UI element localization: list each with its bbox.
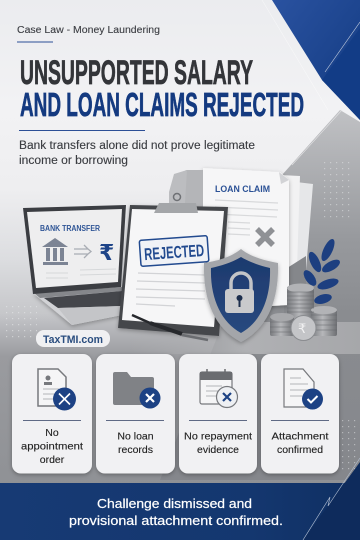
website badge bbox=[36, 330, 110, 347]
card text: No loan bbox=[117, 430, 154, 442]
subtitle bbox=[19, 140, 255, 167]
subtitle: Bank transfers alone did not prove legitimate bbox=[19, 140, 255, 152]
conclusion text bbox=[69, 497, 283, 528]
bottom band bbox=[0, 458, 360, 540]
card text: No repayment bbox=[184, 430, 252, 442]
form lines bbox=[136, 273, 205, 306]
card text bbox=[117, 430, 154, 456]
card text: records bbox=[118, 444, 153, 456]
rejected stamp bbox=[139, 236, 209, 266]
website badge: TaxTMI.com bbox=[43, 334, 103, 346]
card: no loan records bbox=[96, 354, 175, 474]
card text bbox=[272, 430, 329, 456]
card text bbox=[21, 427, 83, 466]
laptop bbox=[23, 205, 126, 325]
icon: calendar with x bbox=[200, 369, 238, 408]
laptop base bbox=[33, 286, 122, 325]
coin stacks bbox=[270, 284, 337, 340]
rejected stamp: REJECTED bbox=[144, 241, 205, 264]
icon: document with check bbox=[284, 369, 323, 410]
shield with padlock bbox=[204, 249, 278, 342]
card text bbox=[184, 430, 252, 456]
icon: folder with x bbox=[113, 372, 160, 408]
card text: confirmed bbox=[277, 444, 323, 456]
icon: bank bbox=[42, 238, 68, 265]
card: attachment confirmed bbox=[261, 354, 339, 474]
card text: Attachment bbox=[272, 430, 329, 442]
laptop screen bbox=[23, 205, 126, 294]
padlock bbox=[231, 273, 251, 292]
card text: No bbox=[45, 427, 59, 439]
clipboard clip bbox=[154, 203, 198, 213]
coin stacks: ₹ bbox=[298, 322, 306, 337]
card text: order bbox=[40, 454, 65, 466]
top folder wedge bbox=[178, 170, 203, 210]
blue corner triangle bbox=[262, 0, 360, 165]
eyebrow underline bbox=[17, 42, 53, 43]
card: no repayment evidence bbox=[179, 354, 257, 474]
document heading: LOAN CLAIM bbox=[215, 184, 270, 194]
stacked back documents bbox=[280, 175, 313, 315]
rupee symbol: ₹ bbox=[99, 241, 114, 266]
X mark bbox=[257, 229, 273, 245]
loan claim document bbox=[203, 168, 289, 310]
title rule bbox=[19, 130, 145, 131]
leaves bbox=[301, 237, 342, 306]
document lines bbox=[215, 200, 278, 235]
subtitle: income or borrowing bbox=[19, 155, 128, 167]
card text: evidence bbox=[197, 444, 239, 456]
pen bbox=[132, 315, 208, 340]
arrow bbox=[74, 245, 91, 258]
screen label: BANK TRANSFER bbox=[40, 224, 100, 233]
screen lines bbox=[46, 269, 116, 278]
title bbox=[20, 54, 304, 123]
eyebrow label: Case Law - Money Laundering bbox=[17, 25, 160, 36]
icon: document with x bbox=[38, 369, 76, 410]
card text: appointment bbox=[21, 440, 83, 452]
clipboard bbox=[118, 170, 228, 336]
rupee coin bbox=[291, 316, 316, 340]
conclusion text: Challenge dismissed and bbox=[97, 497, 252, 511]
card: no appointment order bbox=[12, 354, 92, 474]
conclusion text: provisional attachment confirmed. bbox=[69, 514, 283, 528]
